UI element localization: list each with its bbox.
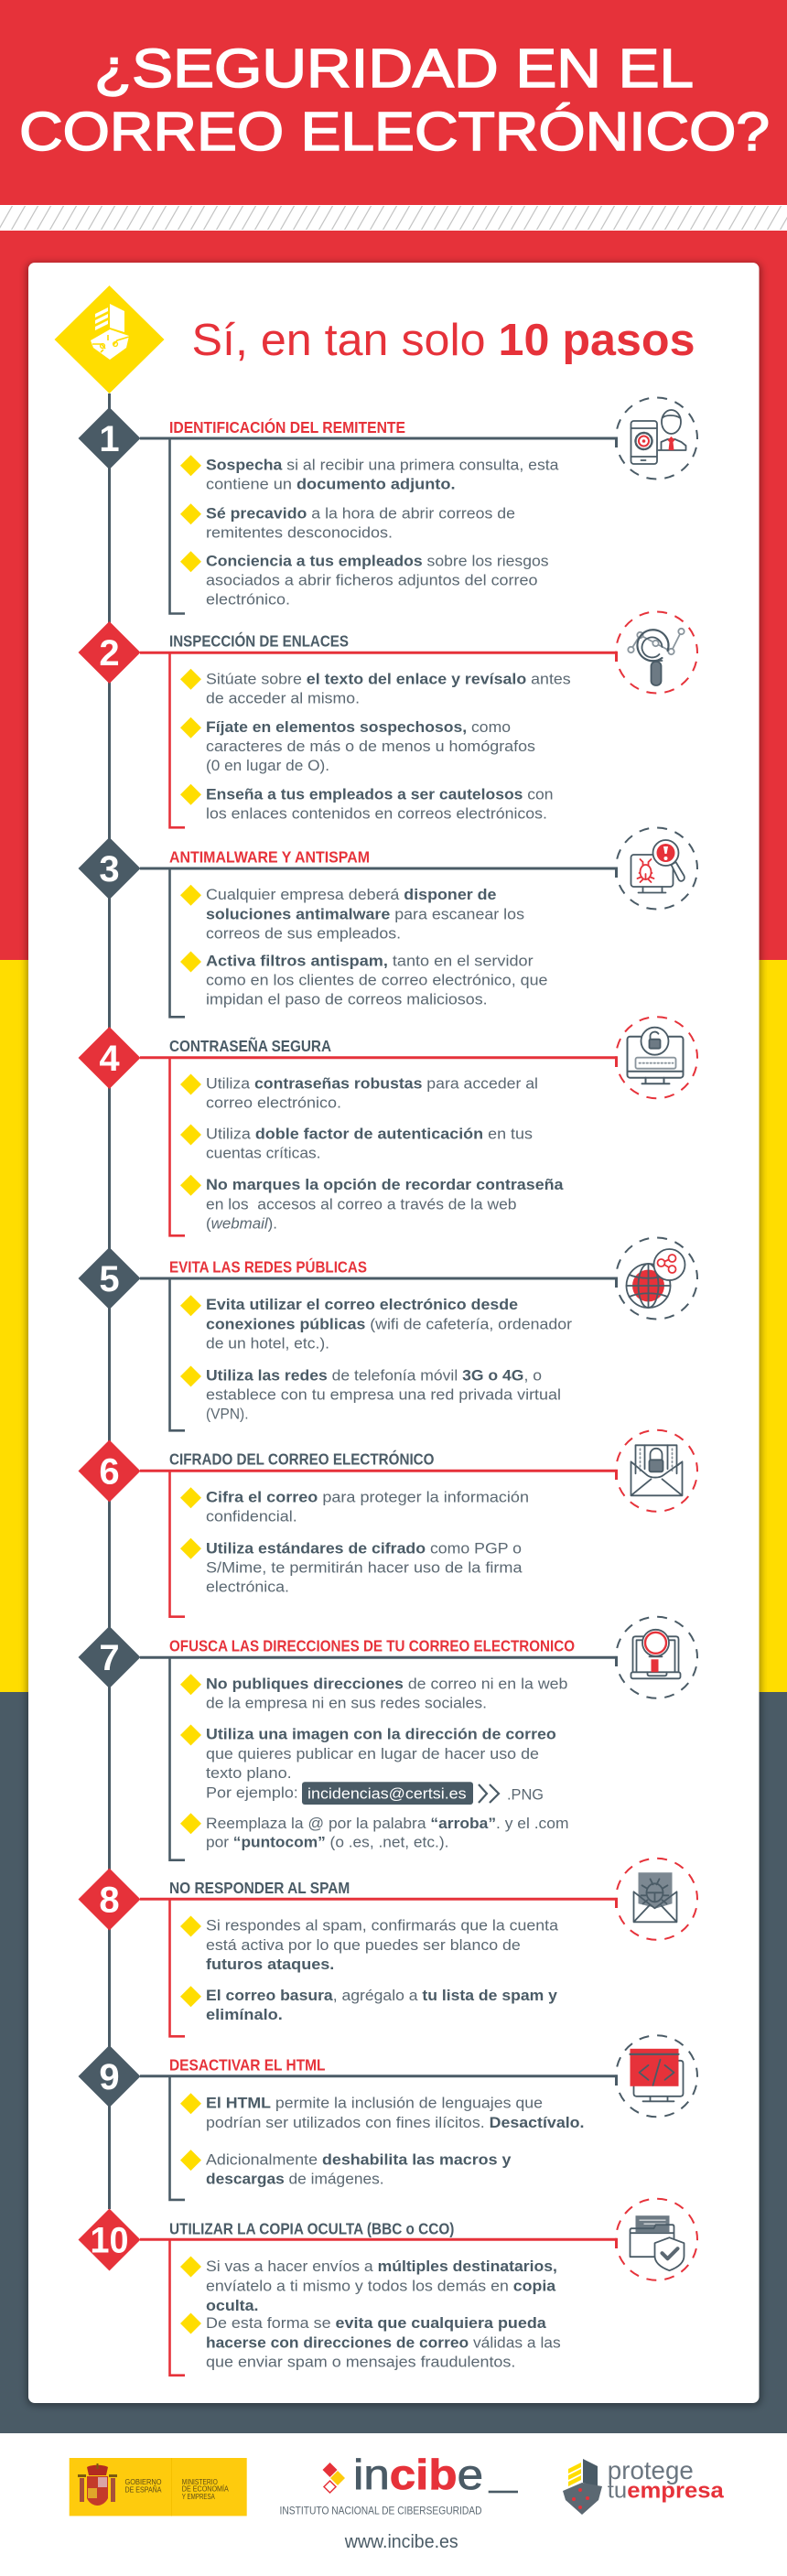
bullet: Activa filtros antispam, tanto en el servidor	[206, 954, 534, 970]
bullet: Cifra el correo para proteger la información	[206, 1490, 529, 1506]
connector lines	[140, 438, 617, 447]
heading: DESACTIVAR EL HTML	[169, 2055, 326, 2074]
email example box	[302, 1782, 473, 1805]
heading: EVITA LAS REDES PÚBLICAS	[169, 1256, 367, 1276]
bullet	[180, 1124, 533, 1162]
bracket	[170, 2239, 185, 2376]
icon: laptop with magnifier	[616, 1617, 697, 1698]
bullet: Utiliza las redes de telefonía móvil 3G o 4G, o	[206, 1367, 542, 1384]
bullet: como en los clientes de correo electrónico, que	[206, 973, 547, 989]
bullet: electrónico.	[206, 592, 290, 609]
bullet	[180, 2093, 585, 2131]
number diamond: 5	[99, 1259, 120, 1299]
footer: incibe logo: incibe	[353, 2451, 483, 2498]
footer background	[0, 2433, 787, 2576]
bullet: Si vas a hacer envíos a múltiples destinatarios,	[206, 2258, 557, 2275]
bullet: de un hotel, etc.).	[206, 1335, 329, 1352]
bullet	[180, 2313, 561, 2371]
bullet: Utiliza doble factor de autenticación en tus	[206, 1126, 533, 1143]
bullet: Utiliza una imagen con la dirección de correo	[206, 1727, 556, 1743]
bullet	[180, 1074, 538, 1112]
icon: phone and person	[616, 397, 697, 480]
footer: Gobierno de España logo	[70, 2458, 247, 2516]
number diamond	[79, 837, 141, 900]
bracket	[170, 1471, 185, 1617]
bullet	[180, 1916, 559, 1973]
heading: CONTRASEÑA SEGURA	[169, 1036, 331, 1055]
icon: yellow diamond with shield	[55, 286, 165, 393]
bullet: No publiques direcciones de correo ni en la web	[206, 1676, 567, 1692]
number diamond: 8	[99, 1880, 120, 1920]
number diamond	[79, 407, 141, 469]
bullet	[180, 455, 559, 493]
background band: red	[0, 0, 787, 960]
number diamond	[79, 1626, 141, 1688]
step 7	[79, 1617, 697, 1860]
bracket	[170, 1657, 185, 1860]
bracket	[170, 2076, 185, 2200]
connector lines	[140, 1657, 617, 1666]
bullet	[180, 1813, 569, 1851]
bullet: impidan el paso de correos maliciosos.	[206, 992, 488, 1008]
connector lines	[140, 2239, 617, 2248]
footer: Gobierno de España logo: GOBIERNO	[124, 2477, 162, 2486]
number diamond	[79, 1247, 141, 1310]
icon: envelope with lock	[616, 1430, 697, 1512]
bullet: De esta forma se evita que cualquiera pueda	[206, 2315, 547, 2332]
bullet: caracteres de más o de menos u homógrafos	[206, 738, 535, 755]
heading: NO RESPONDER AL SPAM	[169, 1879, 350, 1897]
bullet: podrían ser utilizados con fines ilícitos. Desactívalo.	[206, 2115, 585, 2131]
connector lines	[140, 2076, 617, 2086]
bullet: establece con tu empresa una red privada virtual	[206, 1387, 561, 1404]
bullet	[180, 1538, 523, 1595]
bullet	[180, 1674, 567, 1711]
bullet	[180, 1487, 529, 1525]
main vertical timeline	[108, 393, 111, 2209]
number diamond	[79, 2209, 141, 2271]
step 2	[79, 611, 697, 827]
bullet: (VPN).	[206, 1407, 249, 1423]
bullet	[180, 669, 571, 706]
bracket	[170, 1278, 185, 1430]
bullet: El HTML permite la inclusión de lenguajes que	[206, 2096, 543, 2112]
step 9	[79, 2035, 697, 2200]
coat of arms	[78, 2463, 117, 2506]
bullet: Conciencia a tus empleados sobre los riesgos	[206, 554, 549, 570]
heading: CIFRADO DEL CORREO ELECTRÓNICO	[169, 1450, 434, 1469]
bullet: elimínalo.	[206, 2007, 283, 2023]
footer: protege tu empresa logo: tuempresa	[608, 2478, 724, 2503]
bullet: No marques la opción de recordar contraseña	[206, 1177, 564, 1193]
bullet: Utiliza estándares de cifrado como PGP o	[206, 1540, 522, 1557]
striped header divider	[0, 205, 787, 231]
bullet: contiene un documento adjunto.	[206, 477, 456, 493]
connector lines	[140, 868, 617, 878]
bullet	[180, 1365, 561, 1423]
bullet: remitentes desconocidos.	[206, 524, 393, 541]
bullet	[180, 717, 535, 774]
bullet: Evita utilizar el correo electrónico desde	[206, 1297, 518, 1313]
footer: Gobierno de España logo: DE ECONOMÍA	[182, 2484, 229, 2494]
connector lines	[140, 652, 617, 662]
number diamond	[79, 2045, 141, 2107]
number diamond	[79, 1027, 141, 1089]
heading: IDENTIFICACIÓN DEL REMITENTE	[169, 417, 405, 437]
footer website url: www.incibe.es	[344, 2532, 458, 2552]
connector lines	[140, 1278, 617, 1288]
heading: ANTIMALWARE Y ANTISPAM	[169, 847, 370, 866]
bullet: correos de sus empleados.	[206, 925, 401, 942]
bullet	[180, 1724, 556, 1801]
bullet	[180, 503, 515, 541]
bullet: texto plano.	[206, 1765, 292, 1782]
step 6	[79, 1430, 697, 1617]
background band: yellow	[0, 960, 787, 1692]
bullet: cuentas críticas.	[206, 1146, 320, 1162]
footer: incibe logo	[280, 2451, 518, 2517]
bullet: electrónica.	[206, 1579, 289, 1595]
footer: Gobierno de España logo: Y EMPRESA	[182, 2492, 215, 2501]
step 5	[79, 1237, 697, 1430]
connector lines	[140, 1471, 617, 1480]
heading: OFUSCA LAS DIRECCIONES DE TU CORREO ELECTRONICO	[169, 1636, 575, 1654]
bracket	[170, 652, 185, 827]
bullet: hacerse con direcciones de correo válidas a las	[206, 2334, 561, 2351]
connector lines	[140, 1058, 617, 1067]
step 8	[79, 1859, 697, 2036]
number diamond: 4	[99, 1039, 120, 1079]
bullet	[180, 2150, 512, 2188]
bullet	[180, 784, 553, 822]
bullet: Cualquier empresa deberá disponer de	[206, 887, 496, 903]
footer: protege tu empresa logo	[563, 2456, 724, 2515]
icon: monitor with code window	[616, 2035, 697, 2117]
number diamond	[79, 1440, 141, 1503]
bullet	[180, 2257, 557, 2314]
title	[19, 38, 770, 162]
bullet: Reemplaza la @ por la palabra “arroba”. y el .com	[206, 1816, 569, 1832]
heading: INSPECCIÓN DE ENLACES	[169, 631, 349, 651]
bullet: que enviar spam o mensajes fraudulentos.	[206, 2355, 515, 2371]
card panel	[27, 263, 761, 2406]
arrow: double chevron	[479, 1784, 499, 1803]
number diamond: 2	[99, 633, 120, 674]
bullet: soluciones antimalware para escanear los	[206, 906, 524, 922]
step 10	[79, 2199, 697, 2376]
step 4	[79, 1017, 697, 1235]
bullet: conexiones públicas (wifi de cafetería, ordenador	[206, 1316, 573, 1332]
bullet: está activa por lo que puedes ser blanco de	[206, 1937, 521, 1954]
bullet: Sitúate sobre el texto del enlace y revísalo antes	[206, 671, 571, 687]
bullet	[180, 885, 524, 942]
heading: UTILIZAR LA COPIA OCULTA (BBC o CCO)	[169, 2220, 454, 2238]
email example box: incidencias@certsi.es	[307, 1785, 467, 1802]
bullet: S/Mime, te permitirán hacer uso de la firma	[206, 1559, 523, 1576]
bullet	[180, 551, 549, 609]
number diamond: 6	[99, 1451, 120, 1492]
number diamond: 9	[99, 2057, 120, 2097]
number diamond: 1	[99, 419, 120, 459]
bullet: de acceder al mismo.	[206, 690, 360, 706]
icon: globe with share node	[616, 1237, 697, 1320]
bullet: de la empresa ni en sus redes sociales.	[206, 1695, 487, 1711]
bracket	[170, 868, 185, 1017]
title: CORREO ELECTRÓNICO?	[19, 102, 770, 162]
bullet	[180, 952, 547, 1008]
bullet	[180, 1175, 564, 1233]
background band: slate	[0, 1692, 787, 2433]
bullet: los enlaces contenidos en correos electrónicos.	[206, 805, 547, 822]
footer: Gobierno de España logo: MINISTERIO	[182, 2477, 218, 2486]
bullet: Fíjate en elementos sospechosos, como	[206, 719, 511, 736]
bullet: Por ejemplo:	[206, 1784, 298, 1801]
number diamond: 3	[99, 849, 120, 889]
icon: monitor with bug and magnifier	[616, 827, 697, 910]
subtitle: Sí, en tan solo 10 pasos	[192, 316, 695, 365]
bullet: descargas de imágenes.	[206, 2172, 384, 2188]
bullet: (webmail).	[206, 1216, 277, 1233]
icon: envelope with bug	[616, 1859, 697, 1940]
number diamond	[79, 621, 141, 684]
bracket	[170, 1058, 185, 1235]
bullet: Sospecha si al recibir una primera consulta, esta	[206, 457, 559, 473]
bullet: correo electrónico.	[206, 1095, 341, 1112]
bullet: envíatelo a ti mismo y todos los demás en copia	[206, 2279, 556, 2295]
bracket	[170, 438, 185, 613]
png label: .PNG	[507, 1787, 544, 1804]
number diamond: 7	[99, 1638, 120, 1678]
bullet: Enseña a tus empleados a ser cautelosos con	[206, 786, 553, 803]
icon: monitor with password and lock	[616, 1017, 697, 1098]
number diamond	[79, 1869, 141, 1931]
footer: Gobierno de España logo: DE ESPAÑA	[124, 2484, 162, 2494]
bullet: oculta.	[206, 2298, 258, 2314]
footer: protege tu empresa logo: protege	[608, 2456, 694, 2484]
bullet: Sé precavido a la hora de abrir correos de	[206, 505, 515, 522]
bullet: que quieres publicar en lugar de hacer uso de	[206, 1746, 539, 1762]
bullet: Utiliza contraseñas robustas para acceder al	[206, 1076, 538, 1093]
title: ¿SEGURIDAD EN EL	[94, 38, 694, 99]
bullet	[180, 1986, 558, 2023]
bullet: por “puntocom” (o .es, .net, etc.).	[206, 1835, 448, 1851]
bullet: confidencial.	[206, 1509, 297, 1525]
bullet: futuros ataques.	[206, 1956, 334, 1973]
step 1	[79, 397, 697, 613]
bullet: (0 en lugar de O).	[206, 758, 329, 774]
icon: folder with shield	[616, 2199, 697, 2280]
bracket	[170, 1899, 185, 2036]
number diamond: 10	[90, 2220, 128, 2260]
bullet	[180, 1295, 573, 1352]
footer: incibe logo: INSTITUTO NACIONAL DE CIBERSEGURIDAD	[280, 2505, 482, 2517]
bullet: El correo basura , agrégalo a tu lista de spam y	[206, 1988, 558, 2004]
bullet: Si respondes al spam, confirmarás que la cuenta	[206, 1918, 559, 1935]
bullet: Adicionalmente deshabilita las macros y	[206, 2151, 512, 2168]
connector lines	[140, 1899, 617, 1908]
step 3	[79, 827, 697, 1017]
icon: magnifier and link graph	[616, 611, 697, 694]
bullet: asociados a abrir ficheros adjuntos del correo	[206, 573, 538, 589]
bullet: en los accesos al correo a través de la web	[206, 1197, 516, 1213]
